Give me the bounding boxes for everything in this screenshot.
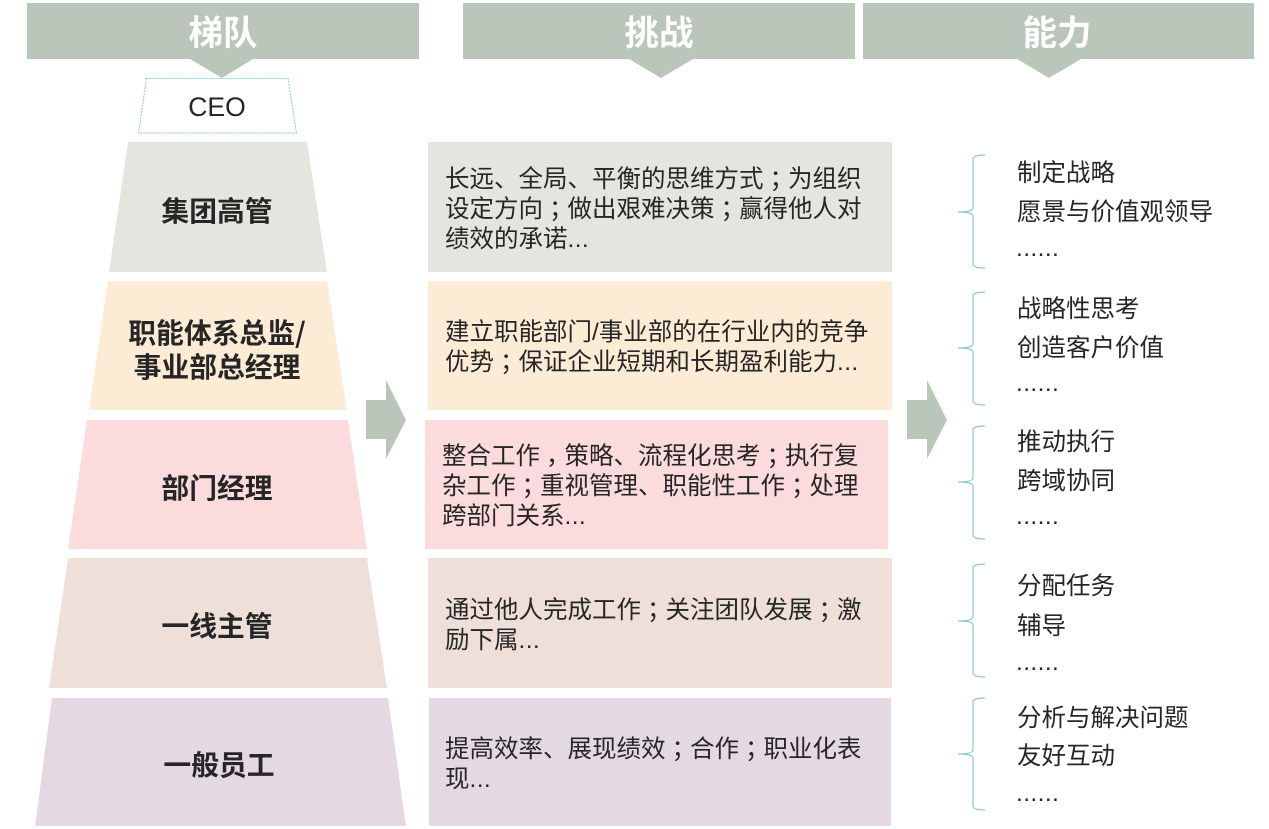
- capability group: 一般员工: ......: [1016, 780, 1059, 807]
- header: 梯队: [27, 3, 419, 78]
- challenge panel: 集团高管: 长远、全局、平衡的思维方式；为组织: [445, 165, 862, 193]
- challenge panel: 职能体系总监: 建立职能部门/事业部的在行业内的竞争: [445, 318, 868, 346]
- capability group: 一般员工: 友好互动: [1017, 742, 1115, 770]
- pyramid tier: 集团高管: 集团高管: [161, 196, 273, 227]
- capability group: 集团高管: 愿景与价值观领导: [1017, 198, 1213, 226]
- pyramid tier: 部门经理: 部门经理: [161, 473, 273, 504]
- challenge panel: 一般员工: 现...: [445, 766, 491, 793]
- challenge panel: 一般员工: 提高效率、展现绩效；合作；职业化表: [445, 735, 862, 763]
- pyramid tier: 一般员工: [35, 698, 406, 826]
- challenge panel: 一线主管: [428, 558, 892, 688]
- capability group: 一般员工: 分析与解决问题: [1017, 704, 1188, 732]
- arrow: challenges to capabilities: [907, 380, 947, 459]
- capability group: 职能体系总监: 创造客户价值: [1017, 334, 1164, 362]
- challenge panel: 集团高管: [428, 142, 892, 272]
- challenge panel: 集团高管: 绩效的承诺...: [445, 225, 589, 253]
- capability group: 一线主管: 辅导: [1017, 612, 1066, 640]
- arrow: tiers to challenges: [366, 380, 406, 459]
- pyramid tier: 职能体系总监/事业部总经理: [89, 281, 347, 410]
- capability group: 部门经理: 推动执行: [1017, 428, 1115, 456]
- capability group: 部门经理: ......: [1016, 503, 1059, 530]
- capability group: 职能体系总监: 战略性思考: [1017, 295, 1140, 323]
- capability group: 职能体系总监: [958, 292, 1164, 405]
- challenge panel: 部门经理: 整合工作，策略、流程化思考；执行复: [442, 442, 858, 470]
- pyramid tier: 一线主管: [49, 558, 387, 688]
- capability group: 部门经理: [958, 426, 1115, 539]
- header: 梯队: 梯队: [188, 15, 258, 53]
- CEO trapezoid: CEO: [188, 92, 246, 122]
- challenge panel: 职能体系总监: [428, 281, 892, 410]
- pyramid tier: 职能体系总监/事业部总经理: 事业部总经理: [134, 352, 301, 383]
- capability group: 集团高管: [958, 155, 1213, 268]
- challenge panel: 部门经理: 杂工作；重视管理、职能性工作；处理: [442, 472, 858, 500]
- pyramid tier: 部门经理: [68, 420, 367, 549]
- capability group: 集团高管: ......: [1016, 235, 1059, 262]
- capability group: 一线主管: [958, 564, 1115, 677]
- header: 挑战: [463, 3, 855, 78]
- CEO trapezoid: [138, 78, 296, 133]
- challenge panel: 集团高管: 设定方向；做出艰难决策；赢得他人对: [445, 195, 862, 223]
- pyramid tier: 集团高管: [109, 142, 327, 272]
- pyramid tier: 一线主管: 一线主管: [161, 611, 273, 642]
- challenge panel: 一线主管: 励下属...: [445, 626, 540, 654]
- capability group: 一线主管: 分配任务: [1017, 572, 1115, 600]
- pyramid tier: 职能体系总监/事业部总经理: 职能体系总监/: [128, 312, 306, 352]
- capability group: 集团高管: 制定战略: [1017, 159, 1115, 187]
- challenge panel: 职能体系总监: 优势；保证企业短期和长期盈利能力...: [445, 348, 859, 376]
- header: 能力: 能力: [1022, 15, 1092, 53]
- capability group: 一般员工: [958, 698, 1188, 810]
- header: 挑战: 挑战: [624, 15, 694, 53]
- capability group: 部门经理: 跨域协同: [1017, 467, 1115, 495]
- capability group: 一线主管: ......: [1016, 649, 1059, 676]
- pyramid tier: 一般员工: 一般员工: [163, 750, 275, 781]
- capability group: 职能体系总监: ......: [1016, 370, 1059, 397]
- header: 能力: [863, 3, 1254, 78]
- challenge panel: 一般员工: [429, 698, 891, 826]
- challenge panel: 部门经理: 跨部门关系...: [442, 502, 586, 530]
- challenge panel: 部门经理: [425, 420, 888, 549]
- challenge panel: 一线主管: 通过他人完成工作；关注团队发展；激: [445, 596, 862, 624]
